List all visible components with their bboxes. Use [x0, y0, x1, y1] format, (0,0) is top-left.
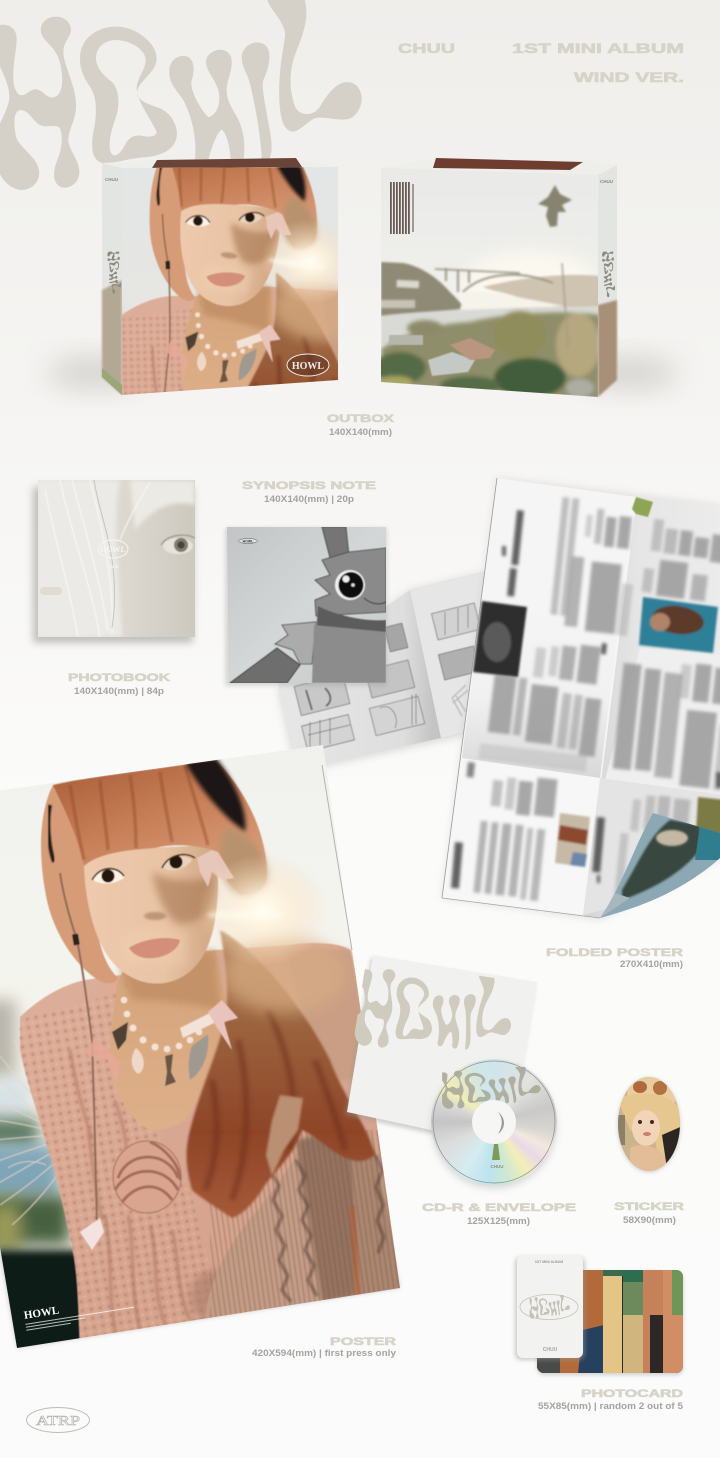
sticker label: 58X90(mm): [623, 1215, 676, 1226]
poster label: 420X594(mm) | first press only: [252, 1348, 397, 1359]
photocard front: [515, 1255, 585, 1360]
blurred text columns: [451, 497, 720, 909]
album title text: 1ST MINI ALBUM: [512, 40, 684, 56]
outbox back: [374, 158, 617, 400]
panel: outbox: [46, 158, 678, 437]
ATRP logo: [26, 1408, 90, 1432]
poster curl: [600, 813, 720, 918]
palm tree: [538, 185, 572, 347]
haze island: [483, 275, 600, 312]
cd disc: CHUU: [490, 1164, 504, 1169]
album title text: [398, 40, 684, 85]
poster label: [252, 1336, 397, 1359]
panel: cd-r and envelope: [345, 955, 557, 1188]
cd label: [422, 1202, 576, 1227]
folded poster label: [546, 947, 683, 970]
photocard label: PHOTOCARD: [581, 1388, 683, 1400]
blurred photos: [473, 597, 720, 867]
title wordmark: HOWL: [0, 0, 362, 190]
photocard label: 55X85(mm) | random 2 out of 5: [538, 1401, 684, 1412]
cd label: CD-R & ENVELOPE: [422, 1202, 576, 1214]
photobook logo: HOWL: [100, 545, 126, 554]
envelope wordmark: [353, 958, 518, 1068]
photocard strip: [537, 1270, 683, 1373]
photocard label: [538, 1388, 684, 1412]
outbox label: OUTBOX: [327, 413, 395, 425]
poster logo and credits: HOWL: [23, 1304, 60, 1322]
outbox front: CHUU: [105, 177, 118, 182]
poster label: POSTER: [330, 1336, 396, 1348]
sticker label: STICKER: [614, 1201, 684, 1213]
barcode: [389, 182, 414, 234]
cd label: 125X125(mm): [467, 1216, 530, 1227]
folded poster label: 270X410(mm): [620, 959, 683, 970]
panel: poster: [0, 730, 420, 1370]
water: [381, 306, 600, 345]
outbox label: 140X140(mm): [329, 427, 392, 438]
logo sticker: [287, 354, 329, 376]
panel: photobook: [33, 480, 195, 643]
sticker label: [614, 1201, 684, 1226]
eye: [161, 535, 195, 554]
synopsis note label: [242, 480, 376, 505]
folded poster label: FOLDED POSTER: [546, 947, 683, 959]
cd wordmark: [442, 1067, 541, 1109]
panel: sticker: [615, 1075, 685, 1175]
character illustration: [230, 527, 386, 683]
photocard front: 1ST MINI ALBUM: [535, 1260, 563, 1264]
photobook label: PHOTOBOOK: [68, 672, 170, 684]
panel: photocard: [515, 1255, 683, 1375]
small label pill: HOWL: [243, 540, 254, 544]
logo sticker: HOWL: [292, 361, 324, 372]
bridge: [463, 275, 553, 292]
panel: folded poster: [430, 470, 720, 930]
photobook logo: [98, 540, 128, 569]
green tape corner: [632, 497, 653, 517]
photocard front: CHUU: [543, 1347, 558, 1353]
album title text: CHUU: [398, 40, 455, 56]
album title text: WIND VER.: [574, 69, 684, 85]
panel: synopsis note booklet: [225, 480, 500, 780]
synopsis note label: SYNOPSIS NOTE: [242, 480, 376, 492]
poster logo and credits: [24, 1306, 134, 1331]
photobook label: [68, 672, 170, 697]
synopsis note label: 140X140(mm) | 20p: [264, 494, 354, 505]
photobook logo: CHUU: [107, 564, 119, 569]
small label pill: [238, 538, 258, 544]
photobook label: 140X140(mm) | 84p: [74, 686, 164, 697]
cd disc: [431, 1059, 557, 1185]
ATRP logo: ATRP: [36, 1414, 80, 1429]
outbox front: [100, 158, 338, 396]
hill: [381, 262, 465, 316]
outbox back: CHUU: [600, 179, 613, 184]
synopsis cover: [225, 527, 387, 686]
outbox label: [327, 413, 395, 438]
